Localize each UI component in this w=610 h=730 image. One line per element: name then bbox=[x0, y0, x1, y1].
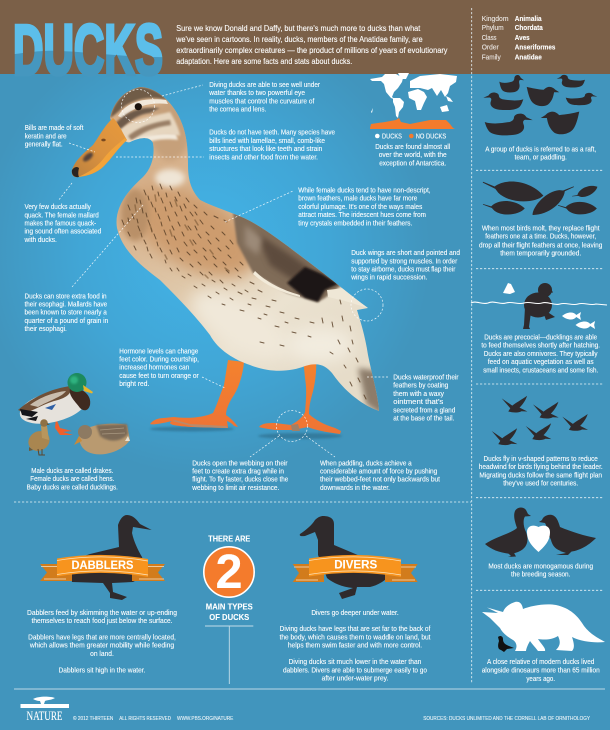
divers text: the body, which causes them to waddle on land, but bbox=[280, 632, 430, 641]
icon: feathers bbox=[480, 174, 599, 220]
text: dinosaurs bbox=[482, 657, 600, 683]
taxonomy list: Class bbox=[482, 33, 497, 42]
fact: waterproofing bbox=[393, 372, 459, 422]
fact: esophagi: their esophagi. Mallards have bbox=[24, 299, 107, 308]
fact: esophagi: their esophagi. bbox=[24, 324, 67, 333]
fact: teeth: insects and other food from the water. bbox=[209, 152, 318, 162]
fact: hormones: cause feet to turn orange or bbox=[119, 371, 199, 380]
divers text: dabblers. Divers are able to submerge easily to go bbox=[283, 665, 427, 674]
fact: webbing: feet to create extra drag while in bbox=[192, 467, 284, 476]
icon: triceratops and duck bbox=[482, 602, 605, 652]
map caption: over the world, with the bbox=[379, 150, 447, 159]
text: precocial: feed on aquatic vegetation as well as bbox=[488, 357, 594, 366]
fact: plumage: brown feathers, male ducks have far more bbox=[298, 194, 417, 203]
fact: webbing: webbing to limit air resistance. bbox=[191, 483, 279, 492]
fact: teeth: Ducks do not have teeth. Many species have bbox=[209, 128, 335, 136]
center badge: there are 2 main types of ducks: 2 bbox=[216, 546, 242, 599]
intro text: adaptation. Here are some facts and stats about ducks. bbox=[176, 56, 352, 66]
foot shadows bbox=[150, 426, 342, 439]
fact: hormones bbox=[119, 346, 199, 388]
center badge: there are 2 main types of ducks bbox=[204, 534, 254, 622]
footer credits: ALL RIGHTS RESERVED bbox=[119, 716, 171, 722]
taxonomy list: Anatidae bbox=[515, 52, 542, 61]
fact: eye muscles: muscles that control the curvature of bbox=[209, 96, 315, 105]
map caption: Ducks are found almost all bbox=[375, 142, 451, 151]
fact: quack: with ducks. bbox=[24, 235, 57, 244]
fact: plumage bbox=[298, 185, 431, 227]
center badge: there are 2 main types of ducks: MAIN TYPES bbox=[206, 601, 253, 611]
text: dinosaurs: A close relative of modern ducks lived bbox=[487, 657, 594, 666]
taxonomy list: Family bbox=[482, 52, 501, 61]
fact: wings: wings in rapid succession. bbox=[350, 273, 427, 282]
text: precocial bbox=[481, 332, 600, 374]
fact: eye muscles: the cornea and lens. bbox=[209, 105, 266, 114]
intro text: extraordinarily complex creatures — the product of millions of years of evolutionary bbox=[176, 45, 448, 55]
fact: eye muscles bbox=[208, 80, 320, 114]
dabblers text: which allows them greater mobility while feeding bbox=[29, 641, 174, 650]
taxonomy list: Chordata bbox=[515, 23, 544, 32]
taxonomy list: Animalia bbox=[515, 14, 542, 23]
fact: hormones: bright red. bbox=[119, 379, 149, 388]
map legend: DUCKS bbox=[382, 132, 402, 140]
fact: teeth: bills lined with lamellae, small, comb-like bbox=[209, 136, 325, 145]
divers badge: DIVERS bbox=[334, 558, 377, 572]
dabblers badge bbox=[40, 515, 165, 600]
right leg and foot bbox=[259, 358, 341, 434]
intro text bbox=[175, 23, 448, 66]
center badge: there are 2 main types of ducks: THERE ARE bbox=[208, 534, 251, 544]
text: monogamous bbox=[488, 561, 593, 579]
mallard family photo bbox=[16, 373, 130, 455]
text: v-shape bbox=[479, 454, 603, 488]
header band bbox=[0, 0, 610, 74]
fact: plumage: colorful plumage. It's one of the ways males bbox=[298, 202, 423, 211]
caption: drakes, hens, ducklings: Male ducks are called drakes. bbox=[31, 466, 113, 475]
body bbox=[110, 87, 379, 411]
logo: Nature: NATURE bbox=[26, 709, 63, 723]
map legend bbox=[375, 132, 446, 140]
divers text: Divers go deeper under water. bbox=[311, 608, 399, 617]
fact: esophagi: quarter of a pound of grain in bbox=[24, 316, 108, 325]
fact: bills: keratin and are bbox=[25, 131, 67, 140]
fact: bills bbox=[25, 123, 83, 149]
fact: eye muscles: Diving ducks are able to see well under bbox=[209, 80, 320, 89]
divers text: after under-water prey. bbox=[322, 674, 388, 683]
text: molting: them temporarily grounded. bbox=[500, 248, 581, 257]
fact: waterproofing: feathers by coating bbox=[393, 381, 448, 390]
map caption: exception of Antarctica. bbox=[379, 158, 446, 168]
dabblers text bbox=[27, 608, 177, 674]
fact: hormones: increased hormones can bbox=[119, 363, 189, 372]
fact: quack: ing sound often associated bbox=[24, 227, 101, 236]
footer credits bbox=[73, 715, 234, 722]
taxonomy list bbox=[482, 14, 555, 61]
icon: ducks and heart bbox=[485, 507, 596, 557]
dabblers text: themselves to reach food just below the surface. bbox=[32, 616, 172, 625]
divers text: Diving ducks sit much lower in the water than bbox=[289, 657, 421, 666]
dabblers text: Dabblers have legs that are more centrally located, bbox=[28, 632, 176, 641]
callout lines bbox=[58, 85, 389, 457]
body shading and plumage bbox=[110, 87, 385, 418]
fact: teeth bbox=[209, 128, 335, 162]
intro text: we've seen in cartoons. In reality, ducks, members of the Anatidae family, are bbox=[175, 34, 423, 44]
fact: paddling: considerable amount of force by pushing bbox=[320, 467, 437, 476]
fact: waterproofing: ointment that's bbox=[393, 397, 444, 406]
caption: drakes, hens, ducklings: Female ducks are called hens. bbox=[30, 474, 114, 483]
duckling bbox=[25, 419, 53, 455]
world map bbox=[370, 73, 457, 129]
fact: wings: supported by strong muscles. In order bbox=[351, 256, 458, 265]
fact: teeth: structures that look like teeth and strain bbox=[209, 144, 322, 153]
fact: bills: Bills are made of soft bbox=[25, 123, 83, 132]
divers badge bbox=[293, 516, 418, 599]
fact: eye muscles: water thanks to two powerful eye bbox=[208, 88, 305, 97]
map legend: NO DUCKS bbox=[416, 132, 446, 140]
fact: quack: quack. The female mallard bbox=[24, 210, 99, 219]
fact: wings: Duck wings are short and pointed and bbox=[351, 248, 460, 257]
fact: paddling bbox=[320, 458, 440, 492]
wing bbox=[233, 212, 345, 302]
head crown and stripes bbox=[110, 87, 168, 118]
hen bbox=[74, 424, 130, 454]
center badge: there are 2 main types of ducks: OF DUCKS bbox=[209, 612, 250, 622]
dabblers badge: DABBLERS bbox=[72, 558, 134, 572]
divers text: Diving ducks have legs that are set far to the back of bbox=[280, 624, 431, 633]
fact: waterproofing: Ducks waterproof their bbox=[393, 372, 459, 381]
icon: duckling feeding with insect and fish bbox=[471, 283, 607, 329]
divers text bbox=[280, 608, 431, 683]
divers text: helps them swim faster and with more control. bbox=[288, 641, 422, 650]
dabblers text: on land. bbox=[90, 649, 114, 658]
fact: paddling: When paddling, ducks achieve a bbox=[320, 458, 413, 467]
fact: webbing: flight. To fly faster, ducks close the bbox=[192, 475, 288, 484]
intro text: Sure we know Donald and Daffy, but there's much more to ducks than what bbox=[176, 23, 421, 33]
fact: plumage: attract mates. The iridescent hues come from bbox=[298, 210, 426, 219]
fact: wings: to stay airborne, ducks must flap their bbox=[351, 265, 456, 274]
text: molting: feathers one at a time. Ducks, however, bbox=[485, 232, 596, 241]
text: molting: When most birds molt, they replace flight bbox=[482, 224, 600, 233]
text: raft: team, or paddling. bbox=[515, 153, 567, 162]
fact: hormones: feet color. During courtship, bbox=[119, 355, 199, 364]
drake bbox=[16, 373, 93, 435]
map caption bbox=[375, 142, 451, 168]
fact: hormones: Hormone levels can change bbox=[119, 346, 198, 355]
dabblers text: Dabblers feed by skimming the water or up-ending bbox=[27, 608, 177, 617]
fact: webbing bbox=[191, 458, 288, 492]
text: raft bbox=[485, 144, 596, 162]
text: v-shape: Ducks fly in v-shaped patterns to reduce bbox=[484, 454, 598, 463]
text: v-shape: they've used for centuries. bbox=[503, 479, 578, 488]
fact: waterproofing: at the base of the tail. bbox=[393, 413, 454, 422]
sources: SOURCES: DUCKS UNLIMITED AND THE CORNELL LAB OF ORNITHOLOGY bbox=[423, 716, 590, 722]
main duck photo bbox=[72, 87, 385, 439]
taxonomy list: Anseriformes bbox=[515, 42, 555, 52]
caption: drakes, hens, ducklings bbox=[27, 466, 118, 491]
taxonomy list: Order bbox=[482, 42, 499, 52]
fact: esophagi bbox=[24, 291, 108, 333]
text: molting bbox=[479, 224, 602, 257]
taxonomy list: Aves bbox=[515, 33, 530, 42]
fact: bills: generally flat. bbox=[25, 140, 63, 149]
text: monogamous: the breeding season. bbox=[511, 570, 570, 579]
text: raft: A group of ducks is referred to as a raft, bbox=[485, 144, 596, 153]
taxonomy list: Kingdom bbox=[482, 14, 508, 23]
fact: plumage: While female ducks tend to have non-descript, bbox=[298, 185, 431, 194]
fact: paddling: downwards in the water. bbox=[320, 483, 390, 492]
footer credits: © 2012 THIRTEEN bbox=[73, 715, 114, 722]
text: dinosaurs: years ago. bbox=[526, 674, 555, 683]
fact: paddling: their webbed-feet not only backwards but bbox=[320, 475, 440, 484]
fact: waterproofing: secreted from a gland bbox=[393, 405, 455, 414]
fact: esophagi: Ducks can store extra food in bbox=[24, 291, 106, 300]
icon: flying ducks bbox=[492, 396, 588, 445]
logo: Nature bbox=[20, 697, 69, 723]
eye bbox=[135, 103, 142, 110]
fact: webbing: Ducks open the webbing on their bbox=[192, 458, 288, 467]
dabblers text: Dabblers sit high in the water. bbox=[58, 665, 146, 674]
fact: quack: makes the famous quack- bbox=[24, 218, 97, 227]
fact: quack: Very few ducks actually bbox=[24, 202, 91, 211]
footer credits: WWW.PBS.ORG/NATURE bbox=[177, 716, 234, 722]
bill bbox=[72, 118, 127, 177]
taxonomy list: Phylum bbox=[482, 23, 504, 32]
fact: quack bbox=[24, 202, 101, 244]
fact: plumage: tiny crystals embedded in their feathers. bbox=[298, 218, 412, 227]
icon: raft of ducks bbox=[483, 75, 597, 135]
left leg and foot bbox=[150, 360, 244, 428]
fact: esophagi: been known to store nearly a bbox=[24, 308, 108, 317]
speckles bbox=[122, 184, 366, 399]
caption: drakes, hens, ducklings: Baby ducks are called ducklings. bbox=[27, 482, 118, 491]
fact: waterproofing: them with a waxy bbox=[393, 389, 444, 398]
fact: wings bbox=[350, 248, 460, 282]
text: monogamous: Most ducks are monogamous during bbox=[488, 561, 593, 570]
title: DUCKS bbox=[13, 12, 163, 90]
